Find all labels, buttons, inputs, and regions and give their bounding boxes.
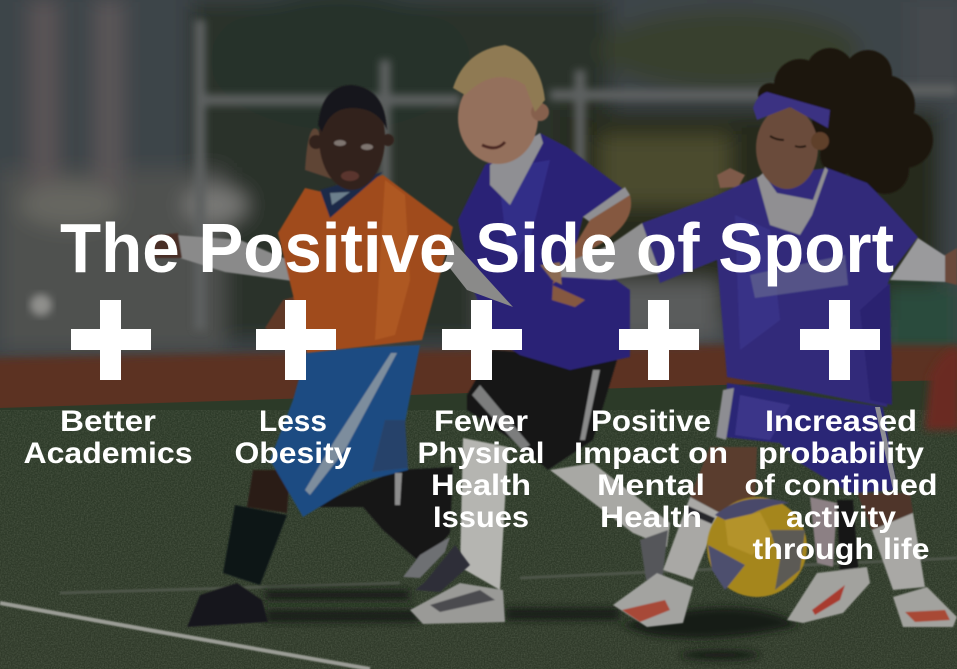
label: increased probability of continued activity through life: probability (758, 437, 924, 470)
label: increased probability of continued activity through life (744, 405, 938, 566)
label: increased probability of continued activity through life: of continued (744, 469, 938, 502)
blurred white spot (30, 294, 52, 316)
plus icon: continued activity (800, 300, 880, 380)
label: positive impact on mental health (574, 405, 728, 534)
curly hair (758, 48, 933, 194)
running track (0, 345, 957, 415)
label: positive impact on mental health: Impact on (574, 437, 728, 470)
boy in purple body (453, 45, 631, 470)
plus icon: less obesity (256, 300, 336, 380)
grass texture (0, 410, 957, 669)
label: better academics: Better (60, 405, 156, 438)
label: fewer physical health issues: Fewer (434, 405, 528, 438)
field line (0, 603, 370, 669)
title: The Positive Side of Sport (60, 209, 894, 287)
label: fewer physical health issues: Health (431, 469, 531, 502)
grass field (0, 380, 957, 669)
label: positive impact on mental health: Positive (591, 405, 711, 438)
stripe on girl shorts (875, 407, 898, 490)
boy in orange torso (150, 85, 453, 353)
label: fewer physical health issues (418, 405, 544, 534)
soccer ball (707, 497, 807, 597)
blurred fence rails (200, 20, 957, 340)
boy in purple legs (410, 438, 670, 624)
red bag at right edge (925, 349, 957, 430)
label: increased probability of continued activity through life: through life (752, 533, 930, 566)
label: fewer physical health issues: Physical (418, 437, 544, 470)
boy in orange legs and shorts (187, 345, 470, 627)
player shadows (265, 590, 800, 660)
label: increased probability of continued activity through life: activity (786, 501, 896, 534)
label: better academics (24, 405, 193, 470)
plus icon: better academics (71, 300, 151, 380)
label: less obesity (234, 405, 352, 470)
plus icon: positive impact on mental health (619, 300, 699, 380)
label: positive impact on mental health: Health (600, 501, 702, 534)
blurred background: sky, trees and fence (0, 0, 957, 380)
boy in purple left sleeve (445, 240, 513, 307)
label: better academics: Academics (24, 437, 193, 470)
label: less obesity: Less (259, 405, 327, 438)
label: positive impact on mental health: Mental (597, 469, 705, 502)
label: fewer physical health issues: Issues (433, 501, 529, 534)
girl with headband (540, 48, 957, 627)
label: increased probability of continued activity through life: Increased (765, 405, 917, 438)
label: less obesity: Obesity (234, 437, 352, 470)
plus icon: fewer physical health issues (442, 300, 522, 380)
